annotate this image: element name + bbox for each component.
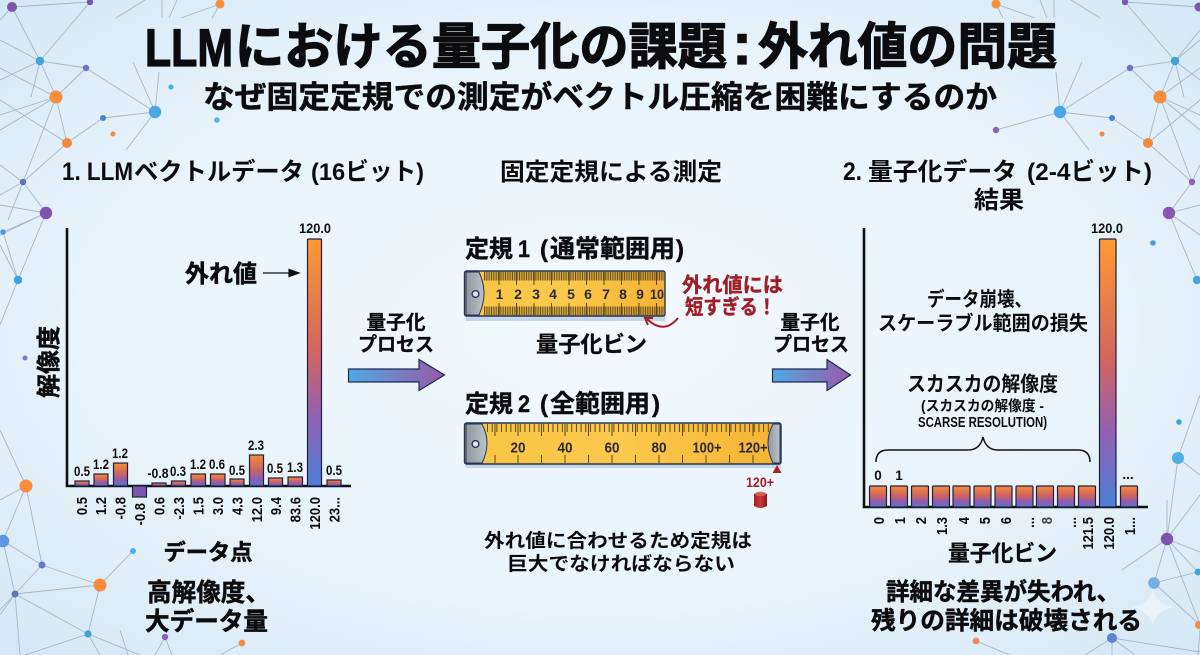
annotation: data collapse — [878, 287, 1088, 335]
label: 量子化 — [366, 312, 426, 334]
ruler 2 heading: 全範囲用 — [550, 390, 650, 418]
ruler 1 heading: 通常範囲用 — [550, 235, 675, 263]
bar chart: quantized bins: 120.0 — [1091, 221, 1123, 236]
bar chart: quantized bins: 1 — [895, 468, 903, 483]
callout: too short — [682, 274, 783, 319]
note: 巨大でなければならない — [507, 553, 735, 575]
bar chart: quantized bins: 1.3 — [934, 517, 950, 535]
ruler 2 heading — [465, 390, 660, 418]
ruler 1: 2 — [514, 286, 522, 302]
bar chart: data points: 1.5 — [191, 497, 207, 515]
bar chart: data points: 1.3 — [287, 460, 303, 475]
brace — [876, 437, 1090, 462]
heading: result: 結果 — [974, 187, 1024, 214]
network decoration: left — [0, 0, 245, 655]
bar chart: data points: 1.2 — [93, 497, 109, 515]
bar chart: quantized bins: 5 — [977, 517, 993, 524]
ruler 1: 7 — [602, 286, 610, 302]
bar chart: data points: -0.8 — [113, 497, 129, 519]
annotation: scarce resolution — [907, 373, 1058, 431]
heading: LLM vector data — [62, 157, 424, 186]
ruler 2 heading: ) — [652, 391, 660, 418]
panel: LLM vector data — [36, 157, 424, 636]
bar chart: data points: 0.5 — [267, 461, 283, 476]
ruler 1: 6 — [584, 286, 592, 302]
bar chart: data points: 0.3 — [170, 464, 186, 479]
x axis label: 量子化ビン — [948, 541, 1057, 566]
callout: too short: 外れ値には — [682, 274, 783, 297]
caption: details lost: 詳細な差異が失われ、 — [886, 578, 1120, 606]
marker: outlier position — [746, 465, 782, 508]
bar chart: data points: -2.3 — [171, 497, 187, 519]
heading: measurement: 固定定規による測定 — [500, 159, 722, 186]
heading: LLM vector data: ベクトルデータ — [134, 157, 304, 186]
annotation: scarce resolution: (スカスカの解像度 - — [921, 397, 1044, 415]
panel: quantized data — [843, 157, 1152, 635]
bar chart: data points: 4.3 — [230, 497, 246, 515]
bar chart: quantized bins: 1... — [1122, 517, 1138, 535]
bar chart: quantized bins: 4 — [956, 517, 972, 524]
process arrow 2 — [772, 312, 850, 390]
title: LLM — [145, 19, 233, 78]
callout: too short: 短すぎる！ — [685, 295, 776, 319]
ruler 2 — [464, 423, 781, 468]
y axis label: 解像度 — [36, 326, 63, 398]
subtitle: なぜ固定定規での測定がベクトル圧縮を困難にするのか — [203, 80, 997, 115]
bar chart: quantized bins: 120.0 — [1101, 517, 1117, 550]
arrow — [772, 360, 850, 390]
bar chart: data points: 12.0 — [249, 497, 265, 522]
heading: LLM vector data: 1. LLM — [62, 158, 133, 186]
bar chart: data points — [67, 221, 351, 530]
caption: high resolution: 高解像度、 — [147, 579, 270, 607]
bar chart: quantized bins: ... — [1122, 467, 1134, 482]
bar chart: data points: 0.5 — [74, 464, 90, 479]
ruler 2: 40 — [558, 440, 572, 456]
ruler 1 — [464, 271, 665, 321]
title — [145, 12, 1057, 78]
bar chart: data points: 2.3 — [248, 438, 264, 453]
bar chart: quantized bins: 8 — [1039, 517, 1055, 524]
ruler 2: 60 — [604, 440, 620, 456]
ruler 2: 20 — [510, 440, 526, 456]
bar chart: data points: 1.2 — [190, 457, 206, 472]
ruler 2 heading: 2 — [518, 391, 530, 418]
bar chart: quantized bins: 2 — [913, 517, 929, 524]
bar chart: data points: -0.8 — [148, 466, 169, 481]
bar chart: data points: 0.5 — [326, 463, 342, 478]
arrow — [348, 360, 444, 390]
bar chart: data points: 0.6 — [152, 497, 168, 515]
icon: sparkle watermark — [1132, 590, 1174, 625]
marker: outlier position: 120+ — [746, 474, 774, 490]
ruler 1 caption: 量子化ビン — [536, 332, 647, 357]
heading: quantized data: 2. — [843, 158, 862, 186]
ruler 2: 100+ — [692, 440, 722, 456]
title: における量子化の課題 — [235, 19, 727, 75]
ruler 1 heading: ( — [540, 236, 548, 263]
arrow: callout to ruler — [645, 318, 678, 327]
bar chart: data points: 0.6 — [209, 457, 225, 472]
heading: quantized data: (2-4ビット) — [1027, 158, 1152, 186]
caption: large data volume: 大データ量 — [145, 607, 268, 636]
label line 2: プロセス — [773, 334, 849, 356]
heading: quantized data — [843, 157, 1152, 186]
label: 量子化 — [780, 312, 840, 334]
bar chart: quantized bins: 0 — [874, 468, 882, 483]
process arrow 1 — [348, 312, 444, 390]
arrow: outlier pointer — [263, 270, 299, 276]
ruler 1: 3 — [532, 286, 540, 302]
bar chart: data points: 1.2 — [112, 446, 128, 461]
x axis label: データ点 — [164, 540, 252, 565]
label line 2: プロセス — [358, 334, 434, 356]
ruler 2: 80 — [652, 440, 666, 456]
bar chart: data points: 1.2 — [93, 457, 109, 472]
bar chart: quantized bins — [864, 221, 1148, 550]
bar chart: quantized bins: 121.5 — [1080, 517, 1096, 550]
bar chart: quantized bins: ... — [1063, 517, 1079, 528]
annotation: data collapse: データ崩壊、 — [927, 287, 1032, 311]
annotation: data collapse: スケーラブル範囲の損失 — [878, 311, 1088, 335]
ruler 2 heading: 定規 — [465, 391, 513, 418]
bar chart: data points: -0.8 — [132, 503, 148, 525]
ruler 1 heading: 1 — [518, 236, 530, 263]
bar chart: quantized bins: 1 — [892, 517, 908, 524]
bar chart: data points: 0.5 — [74, 497, 90, 515]
bar chart: data points: 0.5 — [229, 463, 245, 478]
ruler 1: 9 — [636, 286, 644, 302]
ruler 1: 1 — [496, 286, 504, 302]
bar chart: data points: 3.0 — [210, 497, 226, 515]
ruler 1 heading: ) — [676, 236, 684, 263]
note: 外れ値に合わせるため定規は — [484, 530, 752, 552]
ruler 1: 10 — [650, 286, 664, 302]
ruler 1 heading — [465, 235, 684, 263]
bar chart: quantized bins: 6 — [998, 517, 1014, 524]
ruler 1 heading: 定規 — [465, 236, 513, 263]
bar chart: data points: 9.4 — [268, 497, 284, 515]
ruler 2 heading: ( — [540, 391, 548, 418]
heading: quantized data: 量子化データ — [868, 157, 1017, 186]
title: 外れ値の問題 — [758, 19, 1057, 75]
heading: LLM vector data: (16ビット) — [311, 158, 424, 186]
bar chart: data points: 83.6 — [288, 497, 304, 522]
ruler 1: 5 — [567, 286, 575, 302]
caption: remaining detail destroyed: 残りの詳細は破壊される — [871, 606, 1142, 635]
bar chart: quantized bins: 0 — [871, 517, 887, 524]
bar chart: data points: 120.0 — [299, 221, 331, 236]
annotation: scarce resolution: SCARSE RESOLUTION) — [918, 415, 1047, 431]
panel: fixed ruler measurement — [464, 159, 783, 575]
ruler 2: 120+ — [738, 440, 768, 456]
note — [484, 530, 752, 575]
bar chart: data points: 23... — [327, 497, 343, 522]
network decoration: right — [973, 0, 1200, 655]
ruler 1: 4 — [549, 286, 557, 302]
annotation: scarce resolution: スカスカの解像度 — [907, 373, 1058, 396]
bar chart: data points: 120.0 — [307, 497, 323, 530]
ruler 1: 8 — [619, 286, 627, 302]
bar chart: quantized bins: ... — [1021, 517, 1037, 528]
title: : — [732, 12, 752, 77]
outlier label: 外れ値 — [185, 261, 257, 288]
